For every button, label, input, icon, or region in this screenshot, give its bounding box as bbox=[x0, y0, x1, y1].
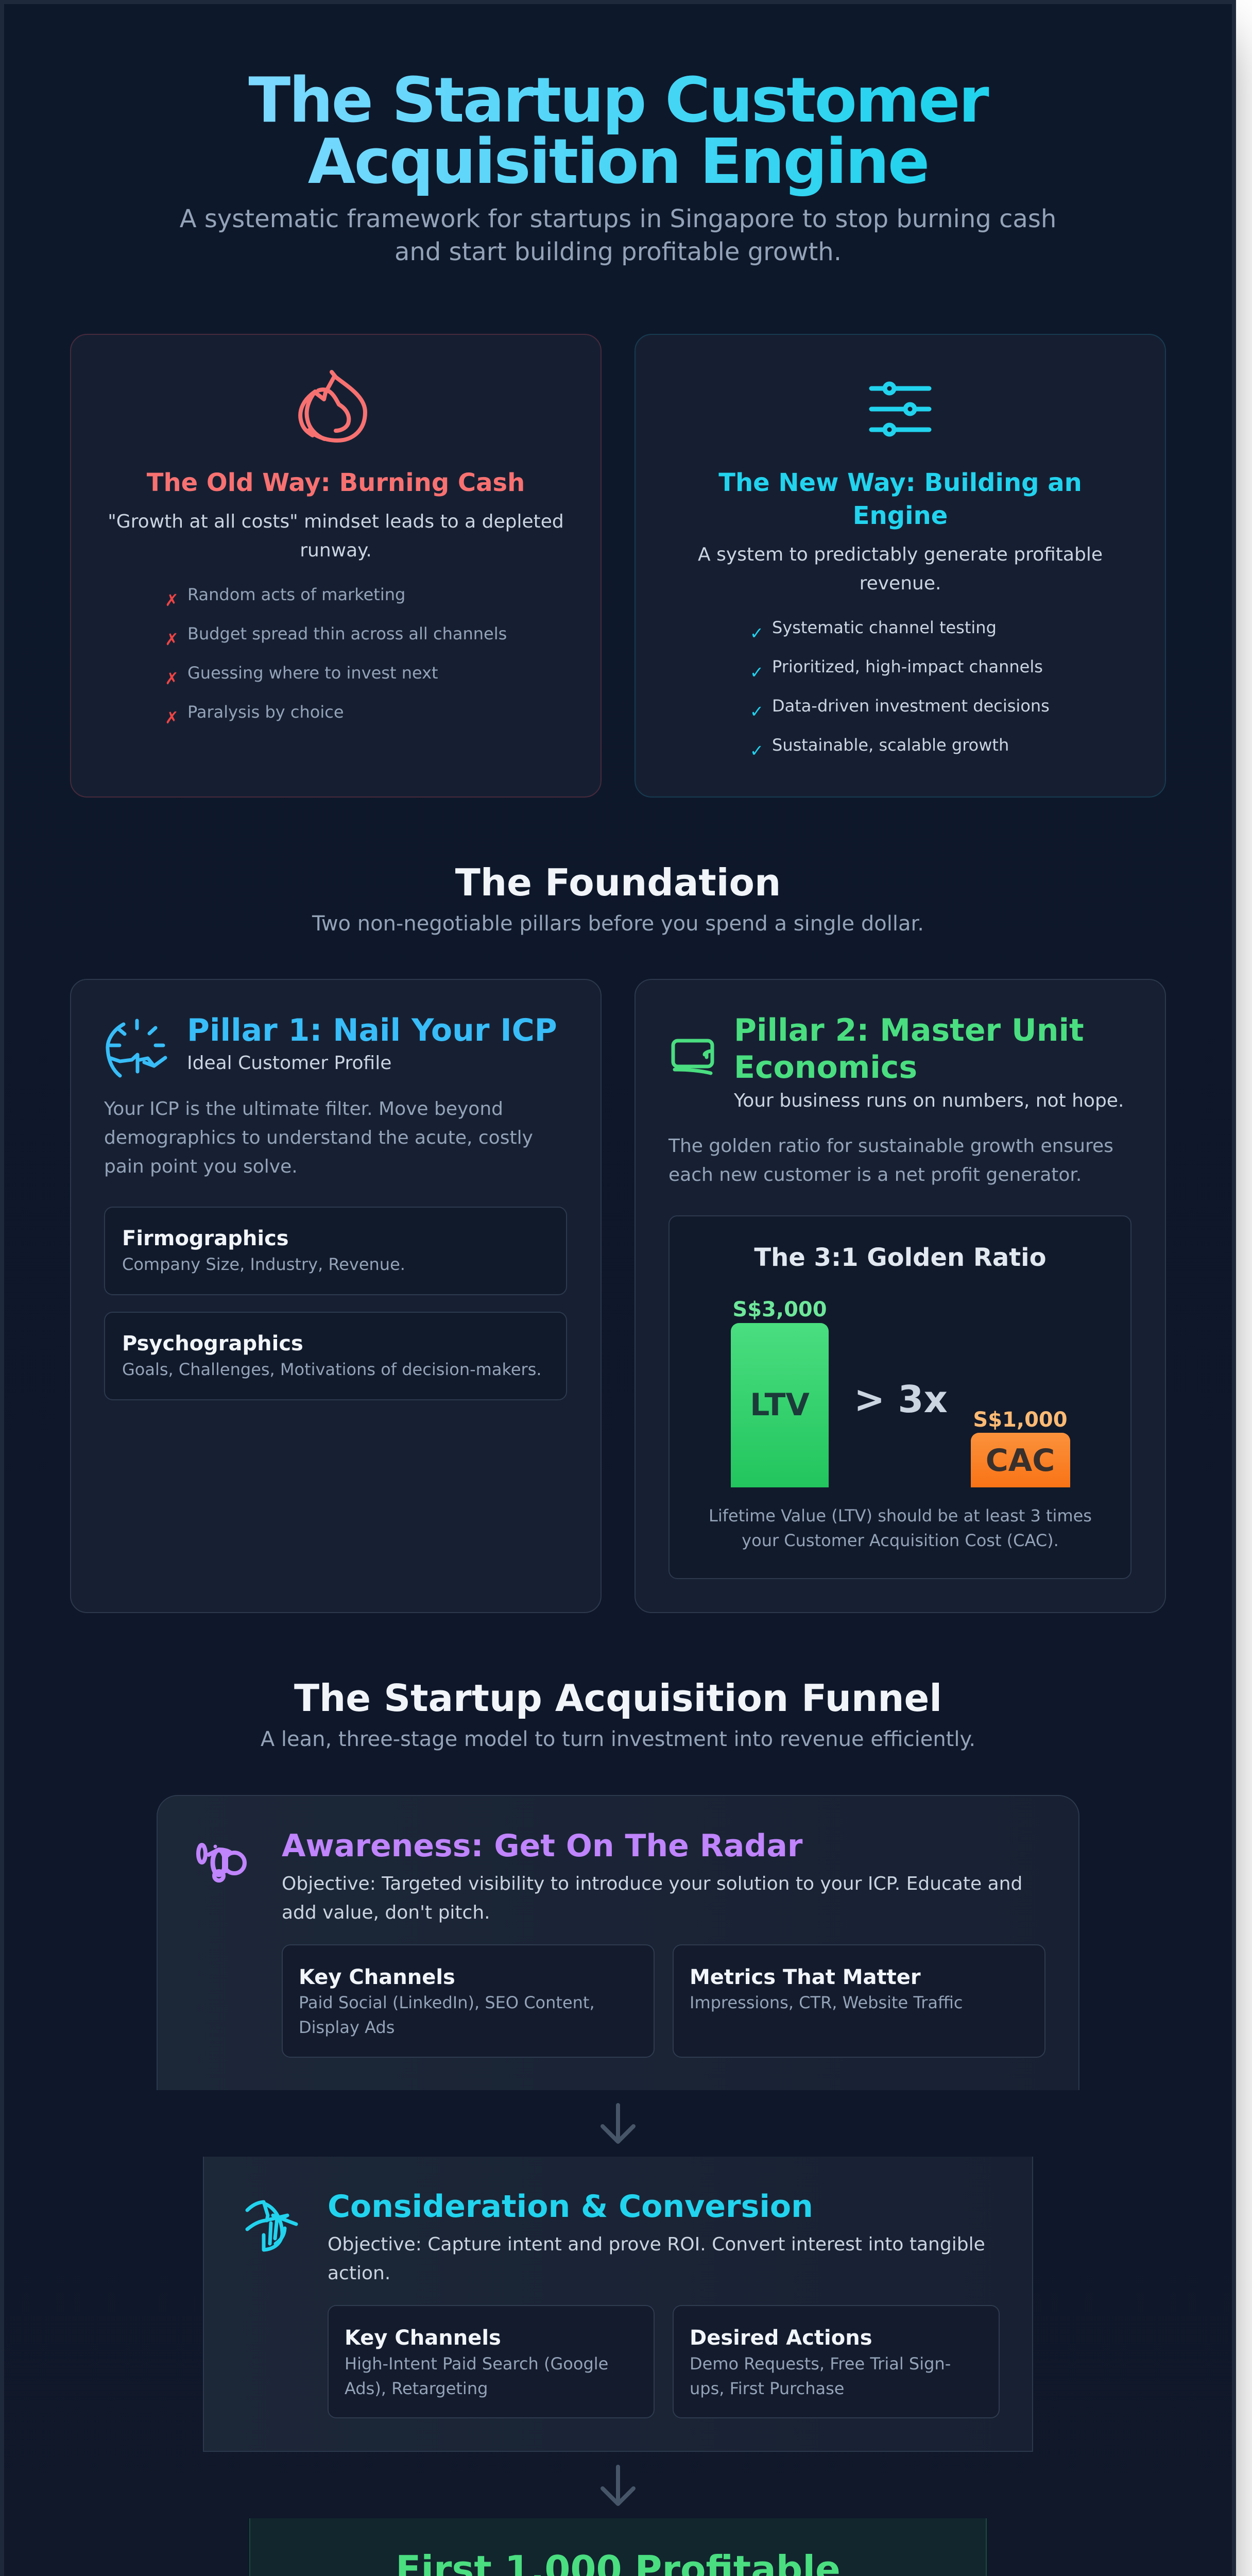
body: pillar 1: Your ICP is the ultimate filter. Move beyond bbox=[104, 1098, 503, 1120]
chart caption: Lifetime Value (LTV) should be at least 3 times bbox=[709, 1506, 1092, 1526]
bar: CAC bbox=[971, 1408, 1070, 1487]
card: key channels: Ads), Retargeting bbox=[345, 2379, 488, 2398]
section heading: foundation: Two non-negotiable pillars before you spend a single dollar. bbox=[312, 912, 924, 936]
description: new way: A system to predictably generate profitable bbox=[698, 544, 1103, 565]
icon: target clock bbox=[108, 1021, 165, 1076]
card: key channels: High-Intent Paid Search (Google bbox=[345, 2354, 608, 2374]
card: metrics: Metrics That Matter bbox=[690, 1965, 921, 1989]
card: desired actions: ups, First Purchase bbox=[690, 2379, 844, 2398]
list: new way: ✓ bbox=[750, 741, 764, 760]
card: key channels bbox=[282, 1945, 654, 2057]
bar: CAC: CAC bbox=[986, 1443, 1055, 1479]
card: key channels: Key Channels bbox=[345, 2326, 501, 2350]
card: key channels: Display Ads bbox=[299, 2018, 395, 2037]
bar: LTV: LTV bbox=[750, 1387, 810, 1423]
panel: first 1000 customers bbox=[249, 2518, 987, 2576]
subheading: pillar 2: Your business runs on numbers, not hope. bbox=[733, 1090, 1124, 1111]
arrow: funnel down 2 bbox=[603, 2467, 633, 2504]
card: metrics bbox=[673, 1945, 1045, 2057]
list: new way: Sustainable, scalable growth bbox=[772, 735, 1009, 755]
heading: awareness: Awareness: Get On The Radar bbox=[282, 1828, 803, 1864]
body: pillar 2: The golden ratio for sustainable growth ensures bbox=[668, 1136, 1113, 1157]
chart: golden ratio bbox=[669, 1216, 1131, 1579]
heading: consideration: Consideration & Conversion bbox=[328, 2189, 813, 2225]
description: old way: runway. bbox=[300, 540, 372, 561]
heading: old way: The Old Way: Burning Cash bbox=[147, 468, 525, 497]
header bbox=[180, 65, 1056, 266]
heading: pillar 2: Pillar 2: Master Unit bbox=[734, 1012, 1084, 1048]
list: new way: Data-driven investment decisions bbox=[772, 696, 1050, 716]
list: old way: Budget spread thin across all channels bbox=[187, 624, 507, 643]
heading: new way: Engine bbox=[853, 501, 948, 530]
chart caption: your Customer Acquisition Cost (CAC). bbox=[742, 1531, 1059, 1550]
card: psychographics: Psychographics bbox=[122, 1332, 303, 1355]
objective: consideration: action. bbox=[328, 2263, 390, 2284]
panel: the new way bbox=[635, 334, 1165, 797]
body: pillar 1: pain point you solve. bbox=[104, 1156, 298, 1177]
list: new way: Prioritized, high-impact channels bbox=[772, 657, 1043, 676]
card: firmographics bbox=[105, 1207, 567, 1295]
subtitle: A systematic framework for startups in Singapore to stop burning cash bbox=[180, 205, 1056, 233]
bar: CAC: S$1,000 bbox=[973, 1408, 1068, 1432]
list: old way bbox=[165, 585, 507, 727]
card: desired actions bbox=[673, 2306, 999, 2418]
icon: wallet bbox=[673, 1041, 712, 1073]
subtitle: and start building profitable growth. bbox=[395, 238, 842, 266]
card: desired actions: Demo Requests, Free Trial Sign- bbox=[690, 2354, 951, 2374]
list: new way bbox=[750, 618, 1050, 760]
description: new way bbox=[698, 544, 1103, 594]
panel: consideration bbox=[203, 2157, 1033, 2452]
list: new way: ✓ bbox=[750, 623, 764, 643]
heading: pillar 2: Economics bbox=[734, 1049, 917, 1086]
title bbox=[248, 65, 989, 198]
panel: awareness bbox=[157, 1795, 1079, 2090]
heading: pillar 2 bbox=[734, 1012, 1084, 1086]
list: new way: ✓ bbox=[750, 663, 764, 682]
panel: pillar 2 bbox=[635, 979, 1165, 1613]
list: old way: ✗ bbox=[165, 630, 179, 649]
objective: awareness bbox=[282, 1873, 1022, 1923]
bar: LTV bbox=[731, 1298, 829, 1487]
list: old way: ✗ bbox=[165, 708, 179, 727]
bar: LTV: S$3,000 bbox=[732, 1298, 827, 1321]
body: pillar 1: demographics to understand the acute, costly bbox=[104, 1127, 533, 1148]
card: metrics: Impressions, CTR, Website Traffic bbox=[690, 1993, 963, 2012]
section heading: funnel: The Startup Acquisition Funnel bbox=[294, 1676, 942, 1720]
card: firmographics: Firmographics bbox=[122, 1227, 289, 1250]
heading: new way bbox=[718, 468, 1082, 530]
objective: consideration: Objective: Capture intent and prove ROI. Convert interest into tangible bbox=[328, 2234, 985, 2255]
card: key channels bbox=[328, 2306, 654, 2418]
list: new way: Systematic channel testing bbox=[772, 618, 997, 637]
card: key channels: Key Channels bbox=[299, 1965, 455, 1989]
card: psychographics: Goals, Challenges, Motivations of decision-makers. bbox=[122, 1360, 542, 1379]
body: pillar 1 bbox=[104, 1098, 533, 1177]
icon: flame bbox=[300, 372, 365, 440]
title: The Startup Customer bbox=[248, 65, 989, 137]
list: old way: Random acts of marketing bbox=[187, 585, 405, 604]
objective: awareness: Objective: Targeted visibility to introduce your solution to your ICP. Educate and bbox=[282, 1873, 1022, 1894]
list: old way: Paralysis by choice bbox=[187, 702, 344, 722]
card: psychographics bbox=[105, 1312, 567, 1400]
objective: awareness: add value, don't pitch. bbox=[282, 1902, 490, 1923]
list: old way: ✗ bbox=[165, 590, 179, 610]
icon: awareness bbox=[198, 1844, 245, 1880]
heading: new way: The New Way: Building an bbox=[718, 468, 1082, 497]
chart heading: The 3:1 Golden Ratio bbox=[754, 1243, 1047, 1272]
list: new way: ✓ bbox=[750, 702, 764, 721]
icon: consideration bbox=[247, 2202, 296, 2250]
heading: pillar 1: Pillar 1: Nail Your ICP bbox=[187, 1012, 557, 1048]
list: old way: ✗ bbox=[165, 669, 179, 688]
body: pillar 2: each new customer is a net profit generator. bbox=[668, 1164, 1082, 1185]
title: Acquisition Engine bbox=[308, 126, 928, 198]
card: key channels: Paid Social (LinkedIn), SEO Content, bbox=[299, 1993, 595, 2012]
description: new way: revenue. bbox=[860, 573, 941, 594]
body: pillar 2 bbox=[668, 1136, 1113, 1185]
panel: pillar 1 bbox=[71, 979, 601, 1613]
ratio label: > 3x bbox=[854, 1378, 948, 1421]
panel: the old way bbox=[71, 334, 601, 797]
objective: consideration bbox=[328, 2234, 985, 2284]
description: old way: "Growth at all costs" mindset leads to a depleted bbox=[108, 511, 564, 532]
arrow: funnel down 1 bbox=[603, 2105, 633, 2142]
card: desired actions: Desired Actions bbox=[690, 2326, 872, 2350]
chart caption bbox=[709, 1506, 1092, 1550]
section heading: foundation: The Foundation bbox=[455, 861, 781, 904]
list: old way: Guessing where to invest next bbox=[187, 663, 438, 683]
icon: sliders bbox=[871, 384, 929, 434]
description: old way bbox=[108, 511, 564, 561]
card: firmographics: Company Size, Industry, Revenue. bbox=[122, 1255, 405, 1274]
section heading: funnel: A lean, three-stage model to turn investment into revenue efficiently. bbox=[261, 1727, 975, 1751]
section heading: funnel bbox=[261, 1676, 975, 1751]
section heading: foundation bbox=[312, 861, 924, 936]
subheading: pillar 1: Ideal Customer Profile bbox=[187, 1053, 391, 1074]
subtitle bbox=[180, 205, 1056, 266]
